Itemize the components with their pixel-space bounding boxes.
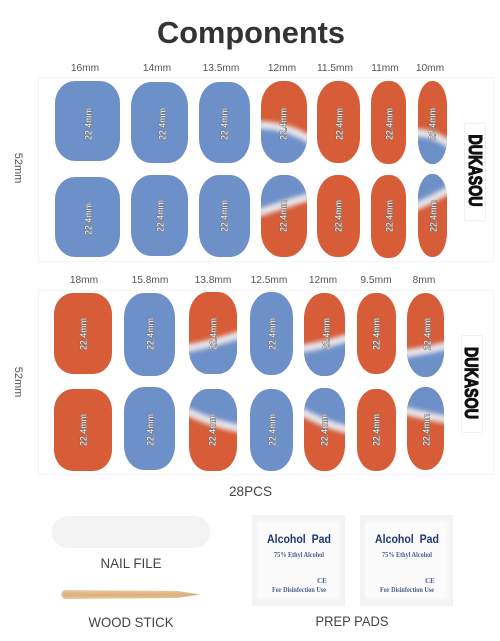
nails: top sheet, first row: 22.4mm: [428, 108, 438, 140]
icon: wood stick: [62, 590, 201, 599]
width labels: bottom sheet: 15.8mm: [132, 275, 168, 286]
width labels: top sheet: 13.5mm: [203, 63, 239, 74]
nails: top sheet, first row: 22.4mm: [220, 108, 230, 140]
nails: bottom sheet, second row: 22.4mm: [146, 414, 156, 446]
nails: bottom sheet, second row: [54, 383, 449, 471]
icon: alcohol prep pad, left: For Disinfection Use: [272, 586, 326, 594]
nails: top sheet, first row: 22.4mm: [384, 108, 396, 140]
nail file label: NAIL FILE: [100, 555, 162, 571]
nails: top sheet, first row: [55, 81, 452, 170]
nails: bottom sheet, first row: 22.4mm: [322, 318, 332, 350]
nails: bottom sheet, first row: 22.4mm: [78, 318, 90, 350]
nails: top sheet, second row: 22.4mm: [334, 200, 344, 232]
icon: alcohol prep pad, left: CE: [317, 577, 327, 585]
nails: top sheet, second row: 22.4mm: [220, 200, 230, 232]
brand tag: top sheet: DUKASOU: [465, 134, 485, 206]
nails: top sheet, second row: 22.4mm: [384, 200, 396, 232]
nails: bottom sheet, second row: 22.4mm: [208, 414, 218, 446]
width labels: top sheet: 14mm: [143, 63, 171, 74]
nails: bottom sheet, second row: 22.4mm: [422, 414, 432, 446]
nails: top sheet, second row: [55, 170, 452, 258]
width labels: top sheet: 11.5mm: [317, 63, 353, 74]
wood stick label: WOOD STICK: [88, 614, 174, 630]
icon: alcohol prep pad, left: [252, 515, 345, 606]
nails: bottom sheet, first row: 22.4mm: [372, 318, 382, 350]
nails: bottom sheet, second row: 22.4mm: [78, 414, 90, 446]
left size label: top sheet height: 52mm: [12, 153, 24, 183]
width labels: top sheet: 16mm: [71, 63, 99, 74]
icon: alcohol prep pad, left: 75% Ethyl Alcohol: [274, 551, 324, 559]
panel: top nail sheet: [38, 63, 494, 262]
width labels: top sheet: 11mm: [371, 63, 399, 74]
nails: top sheet, second row: 22.4mm: [278, 200, 290, 232]
nails: bottom sheet, first row: 22.4mm: [146, 318, 156, 350]
icon: alcohol prep pad, right: CE: [425, 577, 435, 585]
nails: top sheet, second row: 22.4mm: [84, 203, 94, 235]
width labels: top sheet: 12mm: [268, 63, 296, 74]
width labels: bottom sheet: 8mm: [413, 275, 435, 286]
nails: bottom sheet, first row: 22.4mm: [422, 318, 434, 350]
nails: top sheet, second row: 22.4mm: [156, 200, 166, 232]
piece count: 28PCS: [229, 483, 272, 499]
icon: alcohol prep pad, right: 75% Ethyl Alcohol: [382, 551, 432, 559]
nails: bottom sheet, first row: 22.4mm: [208, 318, 220, 350]
nails: top sheet, second row: 22.4mm: [428, 200, 440, 232]
nails: top sheet, first row: 22.4mm: [278, 108, 290, 140]
title: Components: [157, 15, 345, 50]
nails: top sheet, first row: 22.4mm: [334, 108, 346, 140]
width labels: bottom sheet: 9.5mm: [360, 275, 392, 286]
nails: top sheet, first row: 22.4mm: [158, 108, 168, 140]
icon: alcohol prep pad, right: [360, 515, 453, 606]
prep pads label: PREP PADS: [316, 613, 388, 629]
panel: bottom nail sheet: [38, 275, 494, 474]
nails: top sheet, first row: 22.4mm: [84, 108, 94, 140]
nails: bottom sheet, second row: 22.4mm: [372, 414, 382, 446]
icon: nail file: [52, 516, 210, 548]
nails: bottom sheet, first row: [54, 292, 449, 380]
icon: alcohol prep pad, right: For Disinfection Use: [380, 586, 434, 594]
icon: alcohol prep pad, right: Alcohol Pad: [375, 532, 439, 546]
left size label: bottom sheet height: 52mm: [12, 367, 24, 397]
width labels: top sheet: 10mm: [416, 63, 444, 74]
nails: bottom sheet, first row: 22.4mm: [268, 318, 278, 350]
icon: alcohol prep pad, left: Alcohol Pad: [267, 532, 331, 546]
width labels: bottom sheet: 18mm: [70, 275, 98, 286]
width labels: bottom sheet: 13.8mm: [195, 275, 231, 286]
brand tag: bottom sheet: DUKASOU: [461, 347, 481, 419]
nails: bottom sheet, second row: 22.4mm: [320, 414, 330, 446]
width labels: bottom sheet: 12.5mm: [251, 275, 287, 286]
width labels: bottom sheet: 12mm: [309, 275, 337, 286]
width labels: top sheet: [71, 63, 444, 74]
nails: bottom sheet, second row: 22.4mm: [268, 414, 278, 446]
width labels: bottom sheet: [70, 275, 435, 286]
